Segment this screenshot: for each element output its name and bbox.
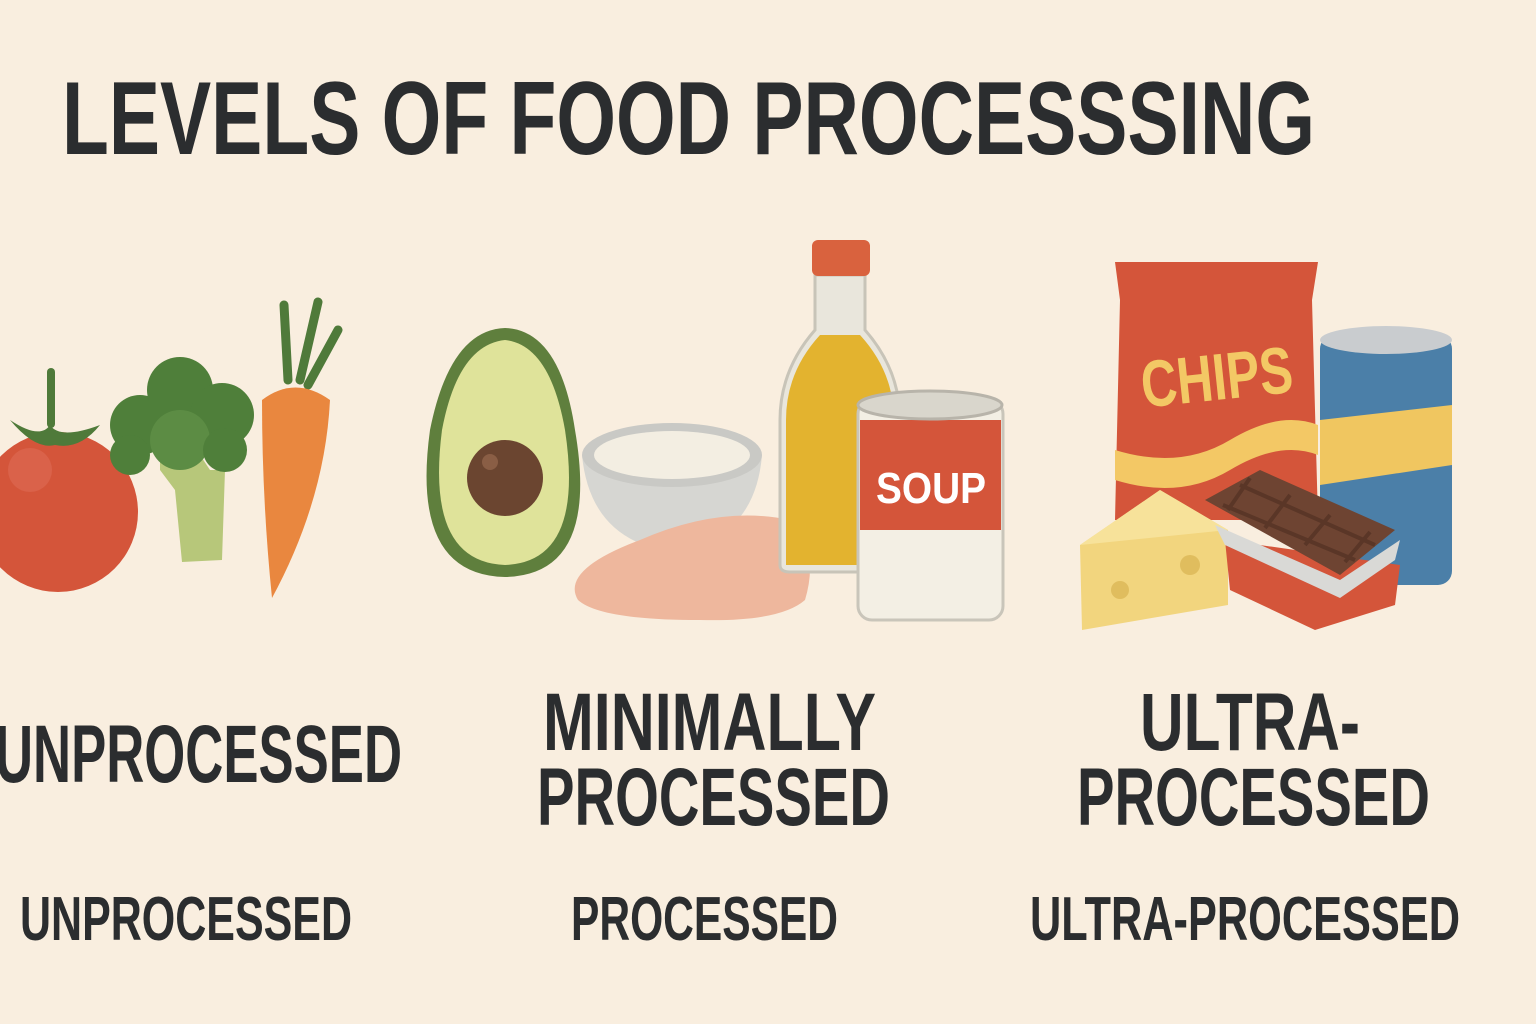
icon: bowl of rice	[582, 423, 762, 552]
heading: ultra-processed: ULTRA-	[1140, 677, 1360, 768]
heading: unprocessed: UNPROCESSED	[0, 709, 402, 800]
icon: soup can: SOUP	[876, 464, 986, 513]
icon: tomato	[0, 368, 138, 592]
icon: chips bag: CHIPS	[1137, 332, 1296, 422]
icon: avocado	[427, 328, 580, 577]
heading: minimally processed	[537, 677, 890, 843]
icon: oil bottle	[780, 240, 900, 572]
icon: cheese	[1080, 490, 1228, 630]
heading: minimally processed: MINIMALLY	[543, 677, 876, 768]
icon: carrot	[262, 302, 338, 598]
heading: ultra-processed	[1077, 677, 1430, 843]
icon: chocolate bar	[1205, 470, 1400, 630]
label: unprocessed: UNPROCESSED	[20, 885, 352, 954]
icon: broccoli	[110, 357, 254, 562]
icon: chicken breast	[575, 516, 810, 620]
heading: minimally processed: PROCESSED	[537, 752, 890, 843]
icon: soup can	[858, 391, 1003, 620]
label: processed: PROCESSED	[571, 885, 838, 954]
icon: soda can	[1320, 326, 1452, 585]
icon: chips bag	[1115, 262, 1318, 520]
